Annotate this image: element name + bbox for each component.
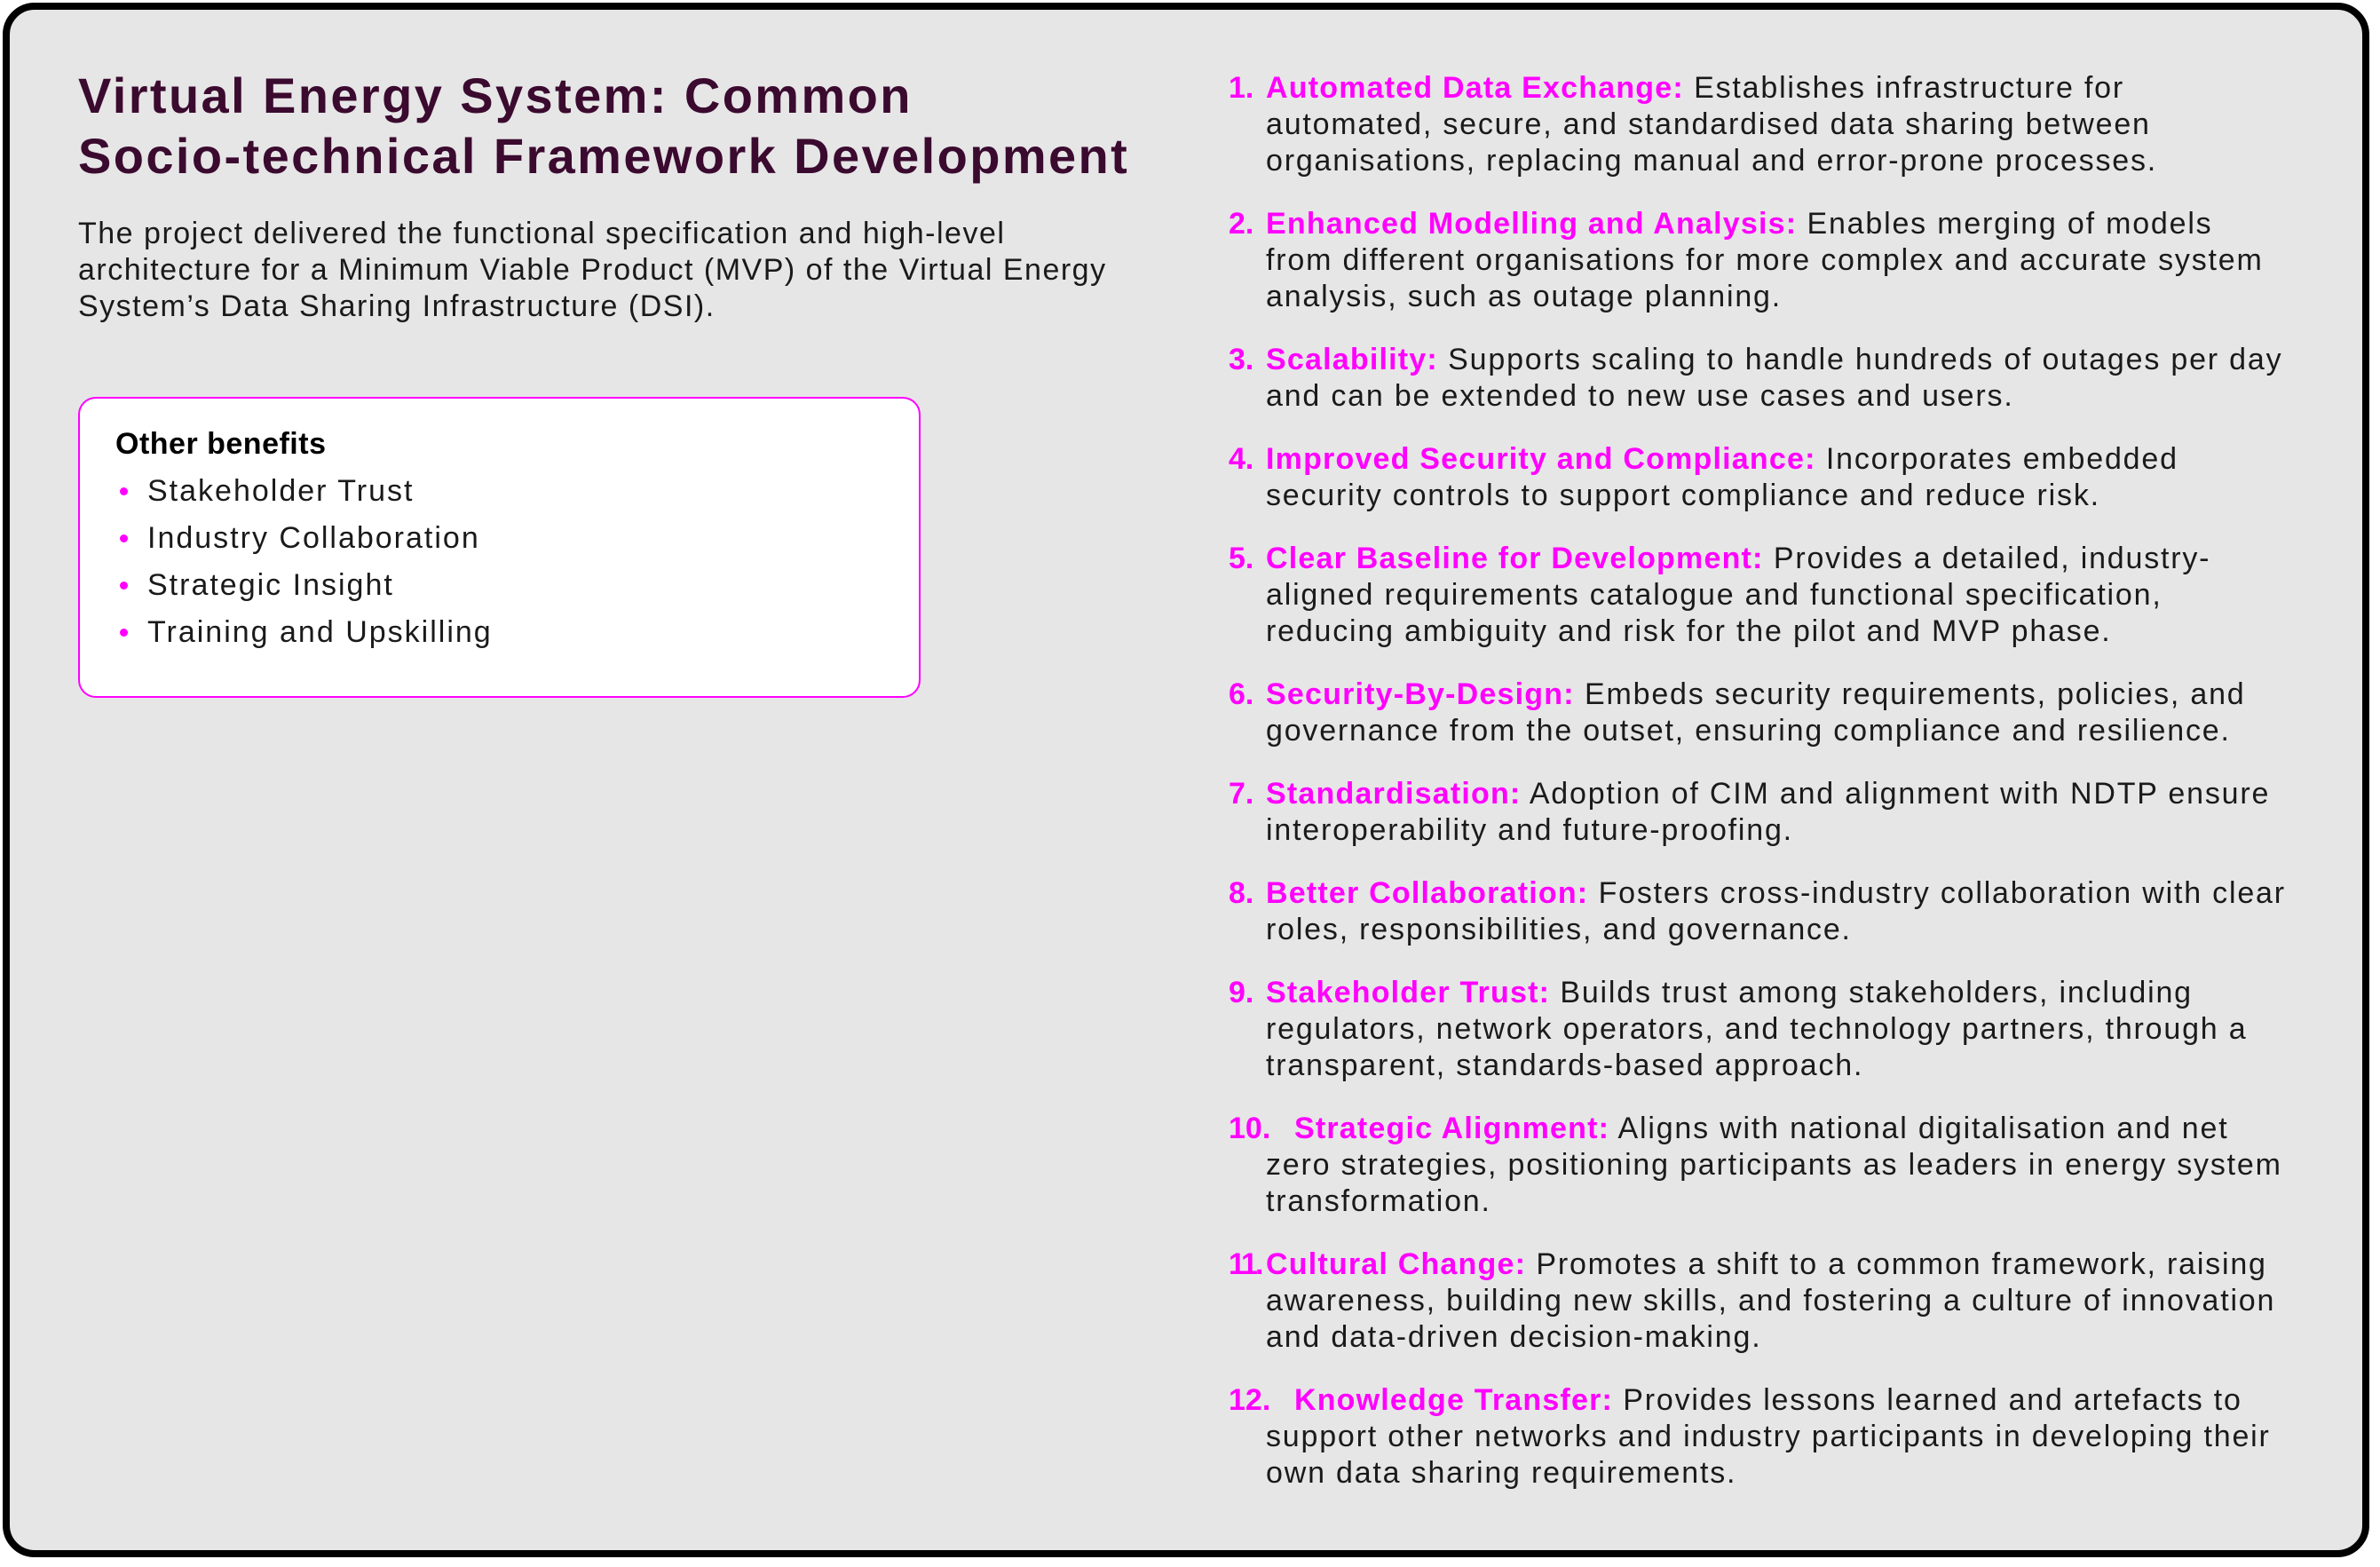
item 11: Cultural Change: Promotes a shift to a common framework, raising — [1266, 1247, 2267, 1281]
item 12: support other networks and industry participants in developing their — [1266, 1420, 2271, 1453]
item 3: Scalability: Supports scaling to handle hundreds of outages per day — [1266, 343, 2282, 376]
item 5 — [1229, 542, 2210, 648]
title — [78, 67, 1129, 184]
item 12: own data sharing requirements. — [1266, 1456, 1736, 1490]
bullet list: Stakeholder Trust — [147, 474, 414, 508]
title: Socio-technical Framework Development — [78, 128, 1129, 184]
item 12 — [1229, 1383, 2271, 1490]
item 5: Clear Baseline for Development: Provides a detailed, industry- — [1266, 542, 2210, 575]
item 1 — [1229, 71, 2157, 178]
item 4: Improved Security and Compliance: Incorporates embedded — [1266, 442, 2178, 476]
item 11: 11. — [1229, 1247, 1261, 1281]
item 9: 9. — [1229, 976, 1253, 1009]
numbered benefits list — [1229, 71, 2286, 1490]
item 7: 7. — [1229, 777, 1253, 811]
text block: intro: The project delivered the functional specification and high-level — [78, 217, 1005, 250]
item 8 — [1229, 876, 2286, 946]
item 1: organisations, replacing manual and error-prone processes. — [1266, 144, 2157, 178]
item 12: 12. — [1229, 1383, 1270, 1417]
item 9: Stakeholder Trust: Builds trust among stakeholders, including — [1266, 976, 2193, 1009]
item 1: 1. — [1229, 71, 1253, 105]
item 1: Automated Data Exchange: Establishes infrastructure for — [1266, 71, 2124, 105]
item 2: 2. — [1229, 207, 1253, 241]
item 4: security controls to support compliance and reduce risk. — [1266, 479, 2100, 512]
bullet list: Training and Upskilling — [147, 615, 493, 649]
item 6: Security-By-Design: Embeds security requirements, policies, and — [1266, 677, 2246, 711]
item 9: regulators, network operators, and technology partners, through a — [1266, 1012, 2247, 1046]
title: Virtual Energy System: Common — [78, 67, 913, 123]
item 11 — [1229, 1247, 2275, 1354]
item 9 — [1229, 976, 2247, 1082]
item 10: 10. — [1229, 1112, 1270, 1145]
item 5: 5. — [1229, 542, 1253, 575]
item 6: 6. — [1229, 677, 1253, 711]
item 3: and can be extended to new use cases and users. — [1266, 379, 2014, 413]
item 9: transparent, standards-based approach. — [1266, 1049, 1863, 1082]
bullet list: Industry Collaboration — [147, 521, 480, 555]
bullet list: Strategic Insight — [147, 568, 394, 602]
item 8: 8. — [1229, 876, 1253, 910]
item 7 — [1229, 777, 2270, 847]
item 12: Knowledge Transfer: Provides lessons learned and artefacts to — [1294, 1383, 2242, 1417]
item 4 — [1229, 442, 2178, 512]
item 11: and data-driven decision-making. — [1266, 1320, 1761, 1354]
item 4: 4. — [1229, 442, 1253, 476]
heading: other benefits: Other benefits — [115, 427, 326, 461]
item 10: transformation. — [1266, 1184, 1491, 1218]
item 5: reducing ambiguity and risk for the pilot and MVP phase. — [1266, 614, 2112, 648]
text block: intro — [78, 217, 1107, 323]
item 10: Strategic Alignment: Aligns with national digitalisation and net — [1294, 1112, 2228, 1145]
item 7: interoperability and future-proofing. — [1266, 813, 1793, 847]
item 2: from different organisations for more complex and accurate system — [1266, 243, 2264, 277]
item 8: Better Collaboration: Fosters cross-industry collaboration with clear — [1266, 876, 2286, 910]
item 6 — [1229, 677, 2246, 748]
bullet list — [120, 474, 493, 649]
item 7: Standardisation: Adoption of CIM and alignment with NDTP ensure — [1266, 777, 2270, 811]
text block: intro: architecture for a Minimum Viable Product (MVP) of the Virtual Energy — [78, 253, 1107, 287]
item 8: roles, responsibilities, and governance. — [1266, 913, 1852, 946]
item 6: governance from the outset, ensuring compliance and resilience. — [1266, 714, 2231, 748]
item 10 — [1229, 1112, 2282, 1218]
item 2: analysis, such as outage planning. — [1266, 280, 1782, 313]
item 3 — [1229, 343, 2282, 413]
text block: intro: System’s Data Sharing Infrastructure (DSI). — [78, 289, 716, 323]
item 2 — [1229, 207, 2264, 313]
item 10: zero strategies, positioning participants as leaders in energy system — [1266, 1148, 2282, 1182]
item 3: 3. — [1229, 343, 1253, 376]
item 1: automated, secure, and standardised data sharing between — [1266, 107, 2151, 141]
item 5: aligned requirements catalogue and functional specification, — [1266, 578, 2163, 612]
panel: other benefits — [78, 397, 921, 698]
item 11: awareness, building new skills, and fostering a culture of innovation — [1266, 1284, 2275, 1318]
item 2: Enhanced Modelling and Analysis: Enables merging of models — [1266, 207, 2212, 241]
